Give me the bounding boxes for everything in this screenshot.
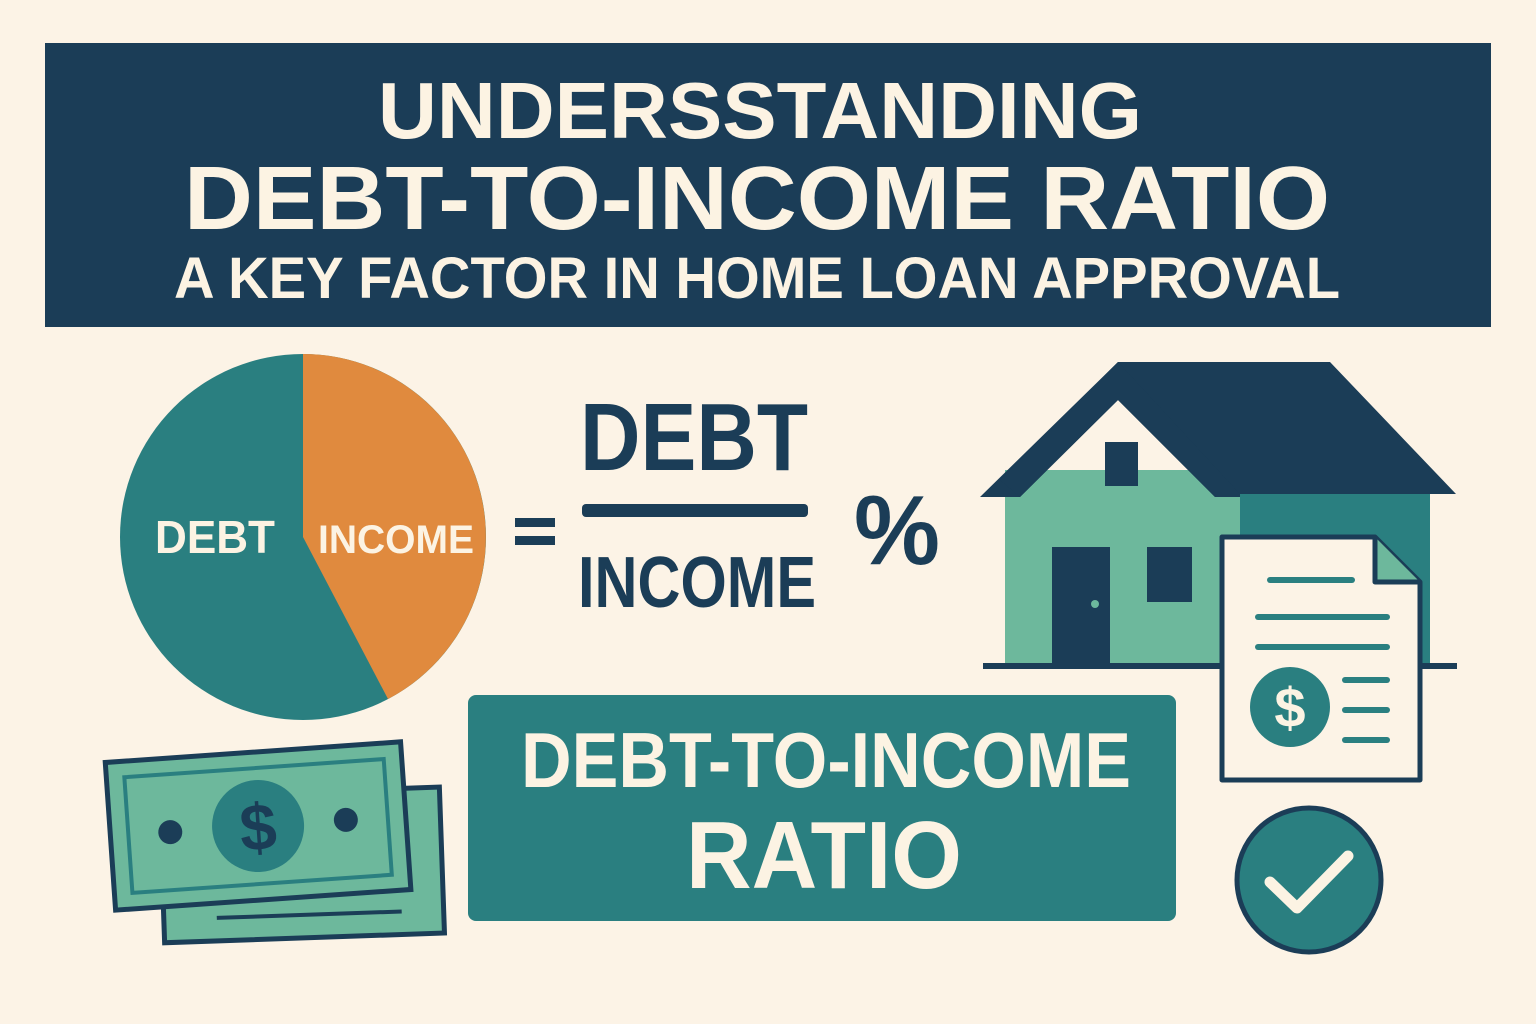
pie chart: DEBT <box>155 511 275 563</box>
icon: check circle <box>1237 808 1381 952</box>
title banner <box>45 43 1491 327</box>
title line 2: DEBT-TO-INCOME RATIO <box>184 149 1330 249</box>
equals sign <box>515 518 555 545</box>
icon: document with dollar <box>1222 537 1420 780</box>
icon: money bills <box>105 742 444 943</box>
icon: house <box>980 362 1457 669</box>
label box: debt-to-income ratio: RATIO <box>686 802 962 909</box>
title line 1: UNDERSSTANDING <box>378 66 1142 155</box>
pie chart <box>120 354 486 720</box>
subtitle: A KEY FACTOR IN HOME LOAN APPROVAL <box>174 246 1340 311</box>
label box: debt-to-income ratio <box>468 695 1176 921</box>
icon: money bills: $ <box>237 789 279 865</box>
formula: DEBT <box>580 384 808 491</box>
icon: document with dollar: $ <box>1274 676 1306 739</box>
formula <box>578 384 816 623</box>
percent sign: % <box>854 475 940 585</box>
formula: INCOME <box>578 543 816 623</box>
label box: debt-to-income ratio: DEBT-TO-INCOME <box>521 716 1131 804</box>
pie chart: INCOME <box>318 518 474 562</box>
